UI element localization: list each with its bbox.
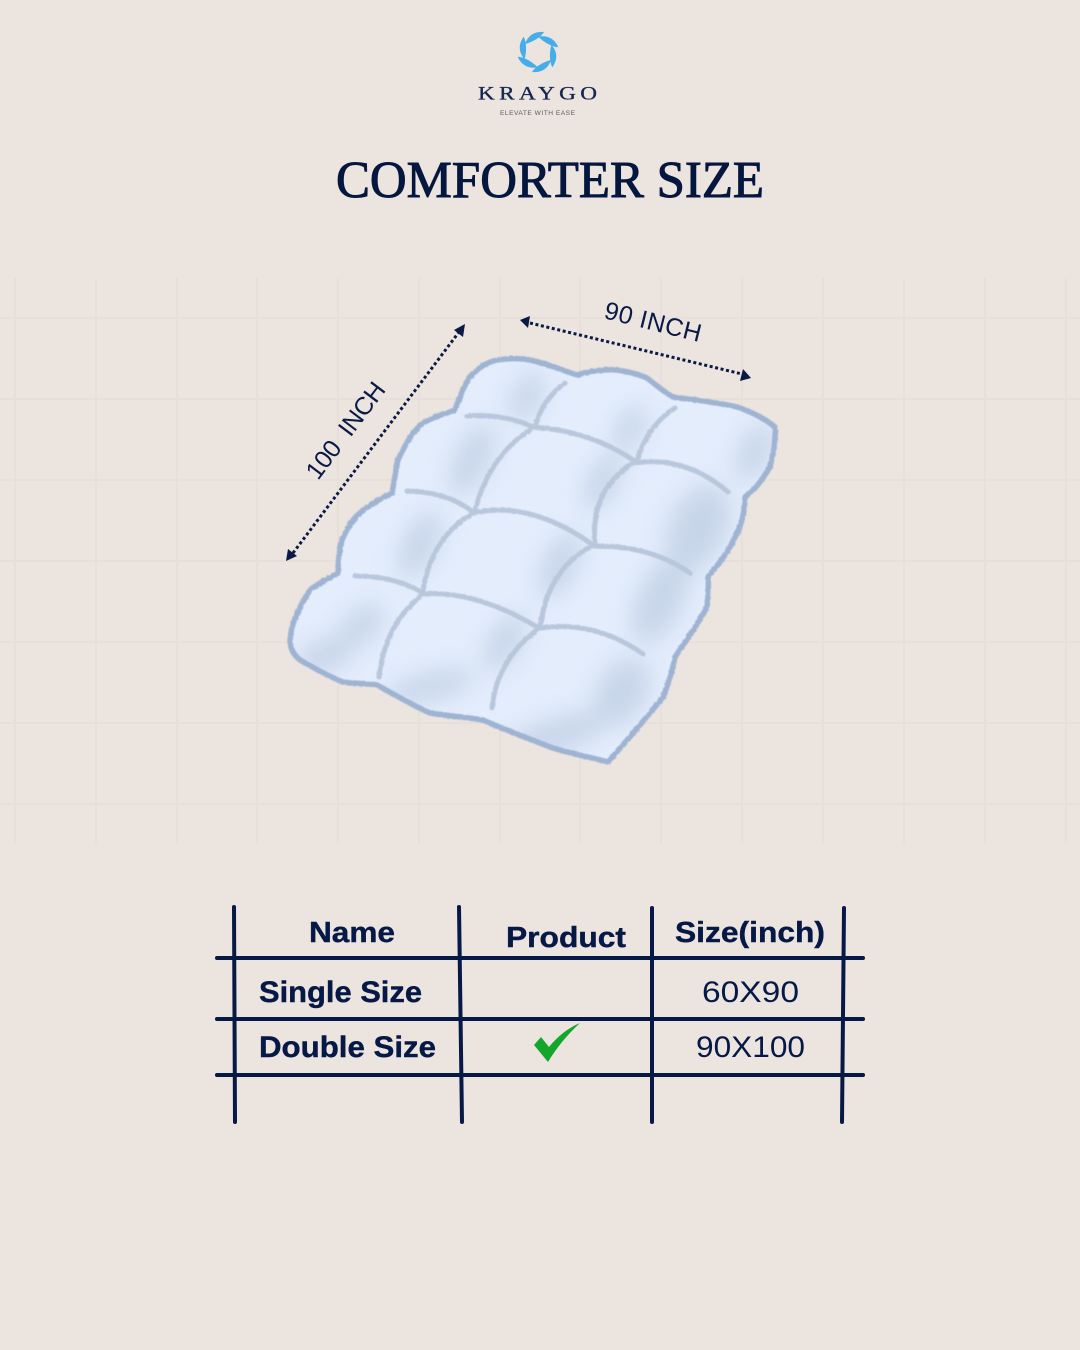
row label: single size: Single Size (259, 976, 422, 1009)
icon: green check mark (534, 1023, 580, 1062)
row value: 90X100: 90X100 (696, 1031, 805, 1064)
header: size: Size(inch) (675, 917, 825, 949)
label: 100 inch: 100 INCH (300, 377, 391, 485)
arrow: 100 inch dimension (286, 324, 465, 561)
row value: 60X90: 60X90 (702, 976, 799, 1009)
logo: Kraygo (478, 31, 597, 117)
title: COMFORTER SIZE (336, 152, 764, 209)
comforter outline (290, 358, 775, 762)
comforter fill and shading (292, 361, 773, 759)
icon: leaf ring (514, 31, 562, 73)
table lines (217, 907, 863, 1122)
comforter seams (355, 383, 728, 708)
illustration: comforter (280, 350, 790, 770)
background grid (0, 278, 1080, 843)
arrow: 90 inch dimension (520, 316, 751, 381)
size table (217, 907, 863, 1122)
label: 90 inch: 90 INCH (602, 297, 704, 348)
header: name: Name (309, 917, 395, 949)
brand name: KRAYGO (478, 82, 597, 104)
header: product: Product (506, 922, 626, 954)
tagline: ELEVATE WITH EASE (500, 110, 576, 117)
row label: double size: Double Size (259, 1031, 436, 1064)
